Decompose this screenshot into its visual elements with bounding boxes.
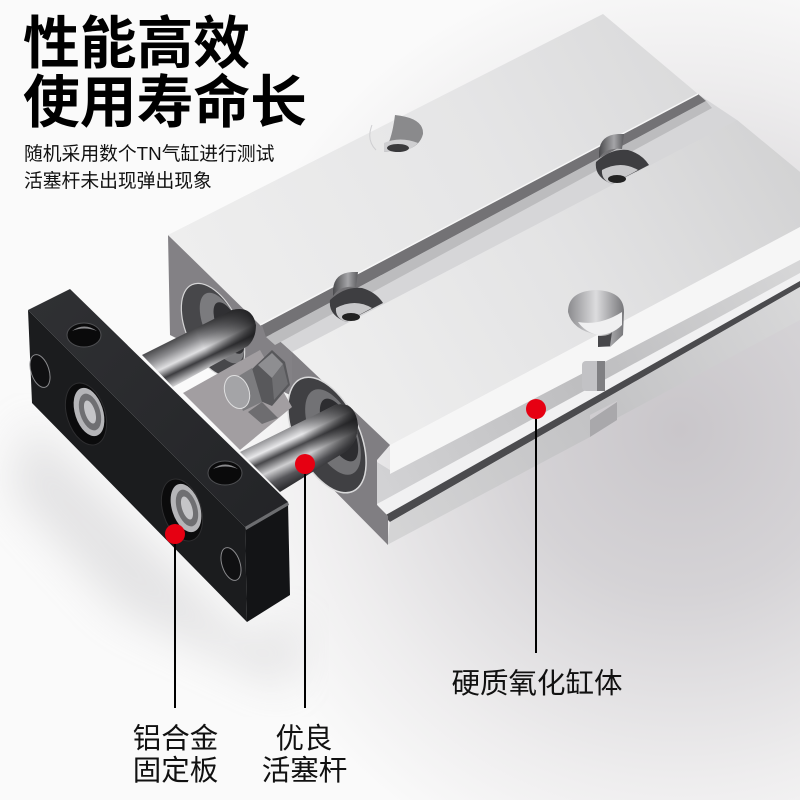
upper block edge highlight <box>260 94 698 325</box>
callout: anodized cylinder body <box>451 399 623 700</box>
lower base side <box>387 287 800 545</box>
left piston screw <box>58 378 114 450</box>
title <box>23 13 307 135</box>
lower block side <box>377 260 800 507</box>
title: 使用寿命长 <box>23 72 307 135</box>
plate end face <box>245 502 290 622</box>
threaded holes on front <box>26 352 245 583</box>
subtitle: 活塞杆未出现弹出现象 <box>24 170 212 191</box>
hole middle left <box>330 272 383 322</box>
right piston screw <box>154 474 210 546</box>
subtitle <box>24 143 275 191</box>
black mounting plate <box>26 289 290 622</box>
notch shadow <box>590 402 617 437</box>
title: 性能高效 <box>23 13 250 76</box>
hole upper right <box>596 134 649 184</box>
callout: anodized cylinder body: 硬质氧化缸体 <box>451 668 623 700</box>
cavity floor <box>183 350 292 450</box>
slot in side <box>582 361 605 391</box>
illustration: cylinder body <box>168 14 800 545</box>
lower block top <box>292 120 800 445</box>
lower block chamfer <box>390 227 800 474</box>
upper block top <box>168 14 698 325</box>
callout: aluminum fixed plate <box>133 524 218 787</box>
upper block end face <box>168 235 300 400</box>
hole upper top <box>370 115 423 152</box>
upper piston rod <box>142 309 256 387</box>
lower block end face <box>272 352 390 545</box>
callout: aluminum fixed plate: 固定板 <box>133 755 218 787</box>
callout: piston rod: 活塞杆 <box>262 755 347 787</box>
illustration: cavity, bolt and piston rods <box>142 309 358 492</box>
groove between blocks <box>262 94 800 352</box>
guide rail <box>377 273 800 522</box>
callout: aluminum fixed plate: 铝合金 <box>133 723 218 755</box>
subtitle: 随机采用数个TN气缸进行测试 <box>24 143 275 164</box>
callout: piston rod: 优良 <box>275 723 333 755</box>
hole lower right <box>568 290 624 347</box>
countersunk holes on top <box>67 323 242 485</box>
hex bolt <box>220 350 290 424</box>
plate front face <box>28 310 247 622</box>
plate top face <box>28 289 288 527</box>
lower piston rod <box>240 404 358 492</box>
callout: piston rod <box>262 454 347 787</box>
mount holes <box>330 115 649 391</box>
